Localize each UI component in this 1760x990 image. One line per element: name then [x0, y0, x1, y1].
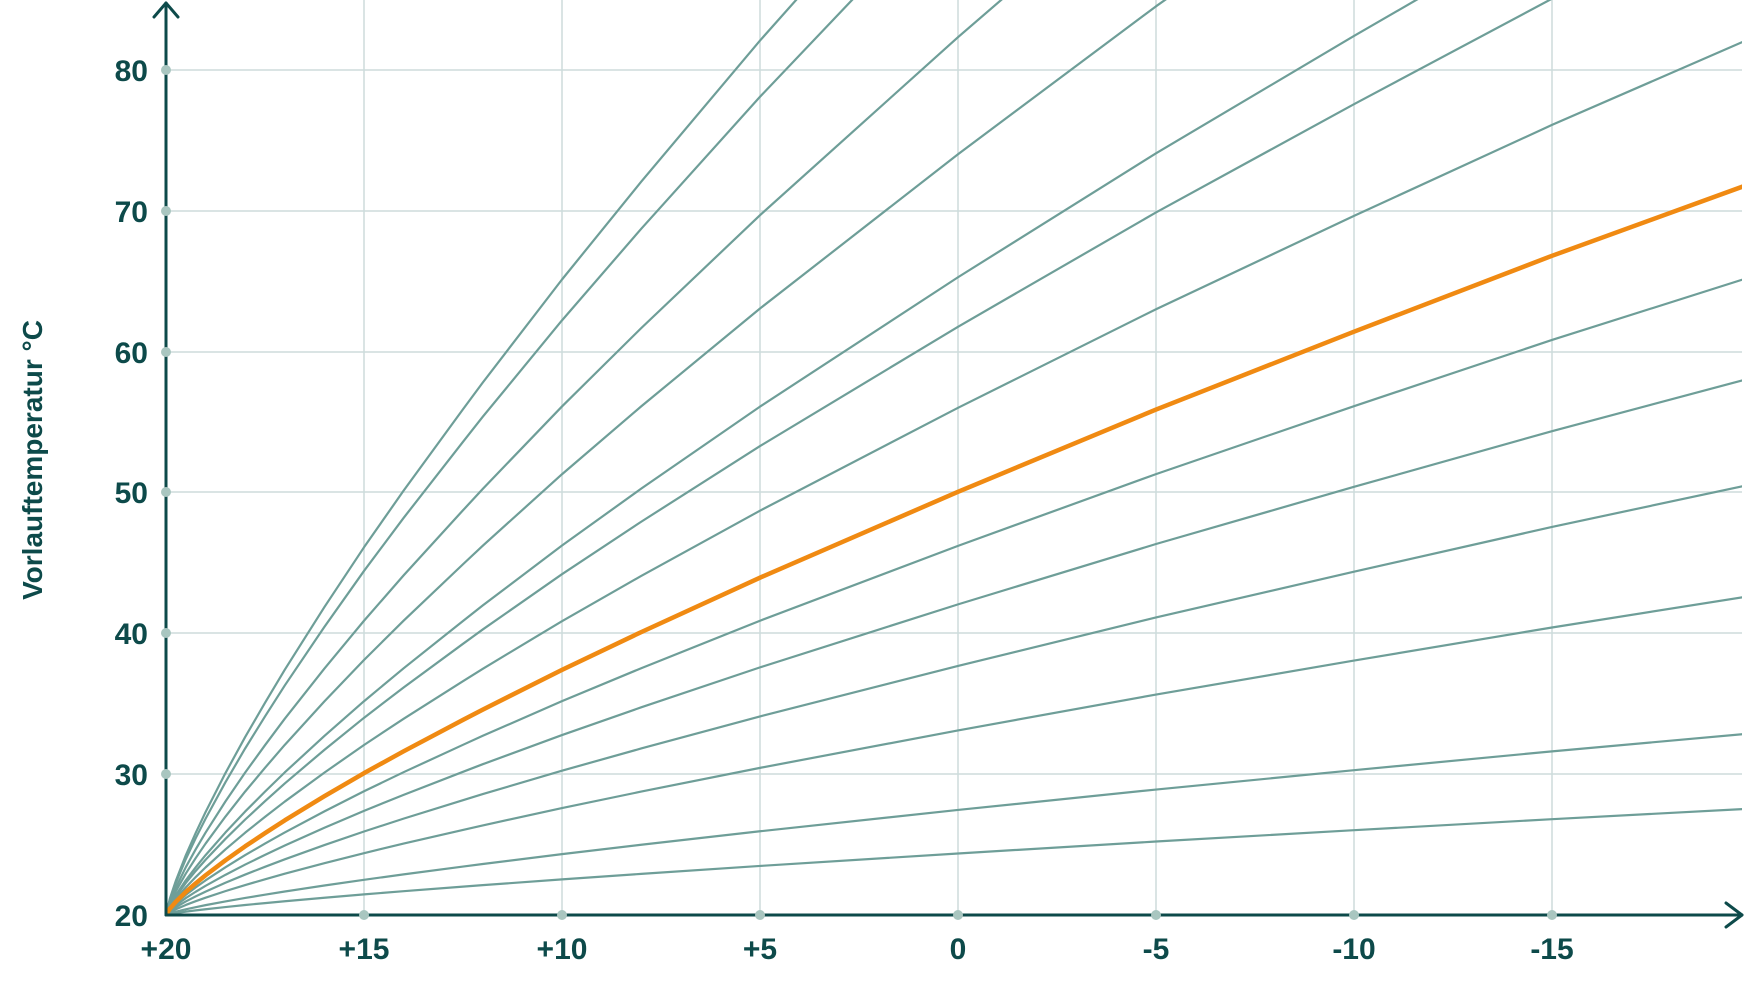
y tick labels: 50: [115, 477, 148, 510]
y tick labels: 80: [115, 55, 148, 88]
y tick labels: [115, 55, 148, 933]
axis dots: [161, 65, 1557, 920]
x tick labels: -10: [1332, 933, 1376, 966]
y tick labels: 60: [115, 337, 148, 370]
x tick labels: +10: [537, 933, 587, 966]
x tick labels: -5: [1143, 933, 1169, 966]
x tick labels: -15: [1530, 933, 1574, 966]
x tick labels: +15: [339, 933, 389, 966]
y axis title: Vorlauftemperatur °C: [17, 320, 48, 600]
y tick labels: 40: [115, 618, 148, 651]
y tick labels: 70: [115, 196, 148, 229]
x tick labels: +5: [743, 933, 777, 966]
y tick labels: 30: [115, 759, 148, 792]
x tick labels: +20: [141, 933, 191, 966]
y tick labels: 20: [115, 900, 148, 933]
x tick labels: [141, 933, 1574, 966]
x tick labels: 0: [950, 933, 966, 966]
